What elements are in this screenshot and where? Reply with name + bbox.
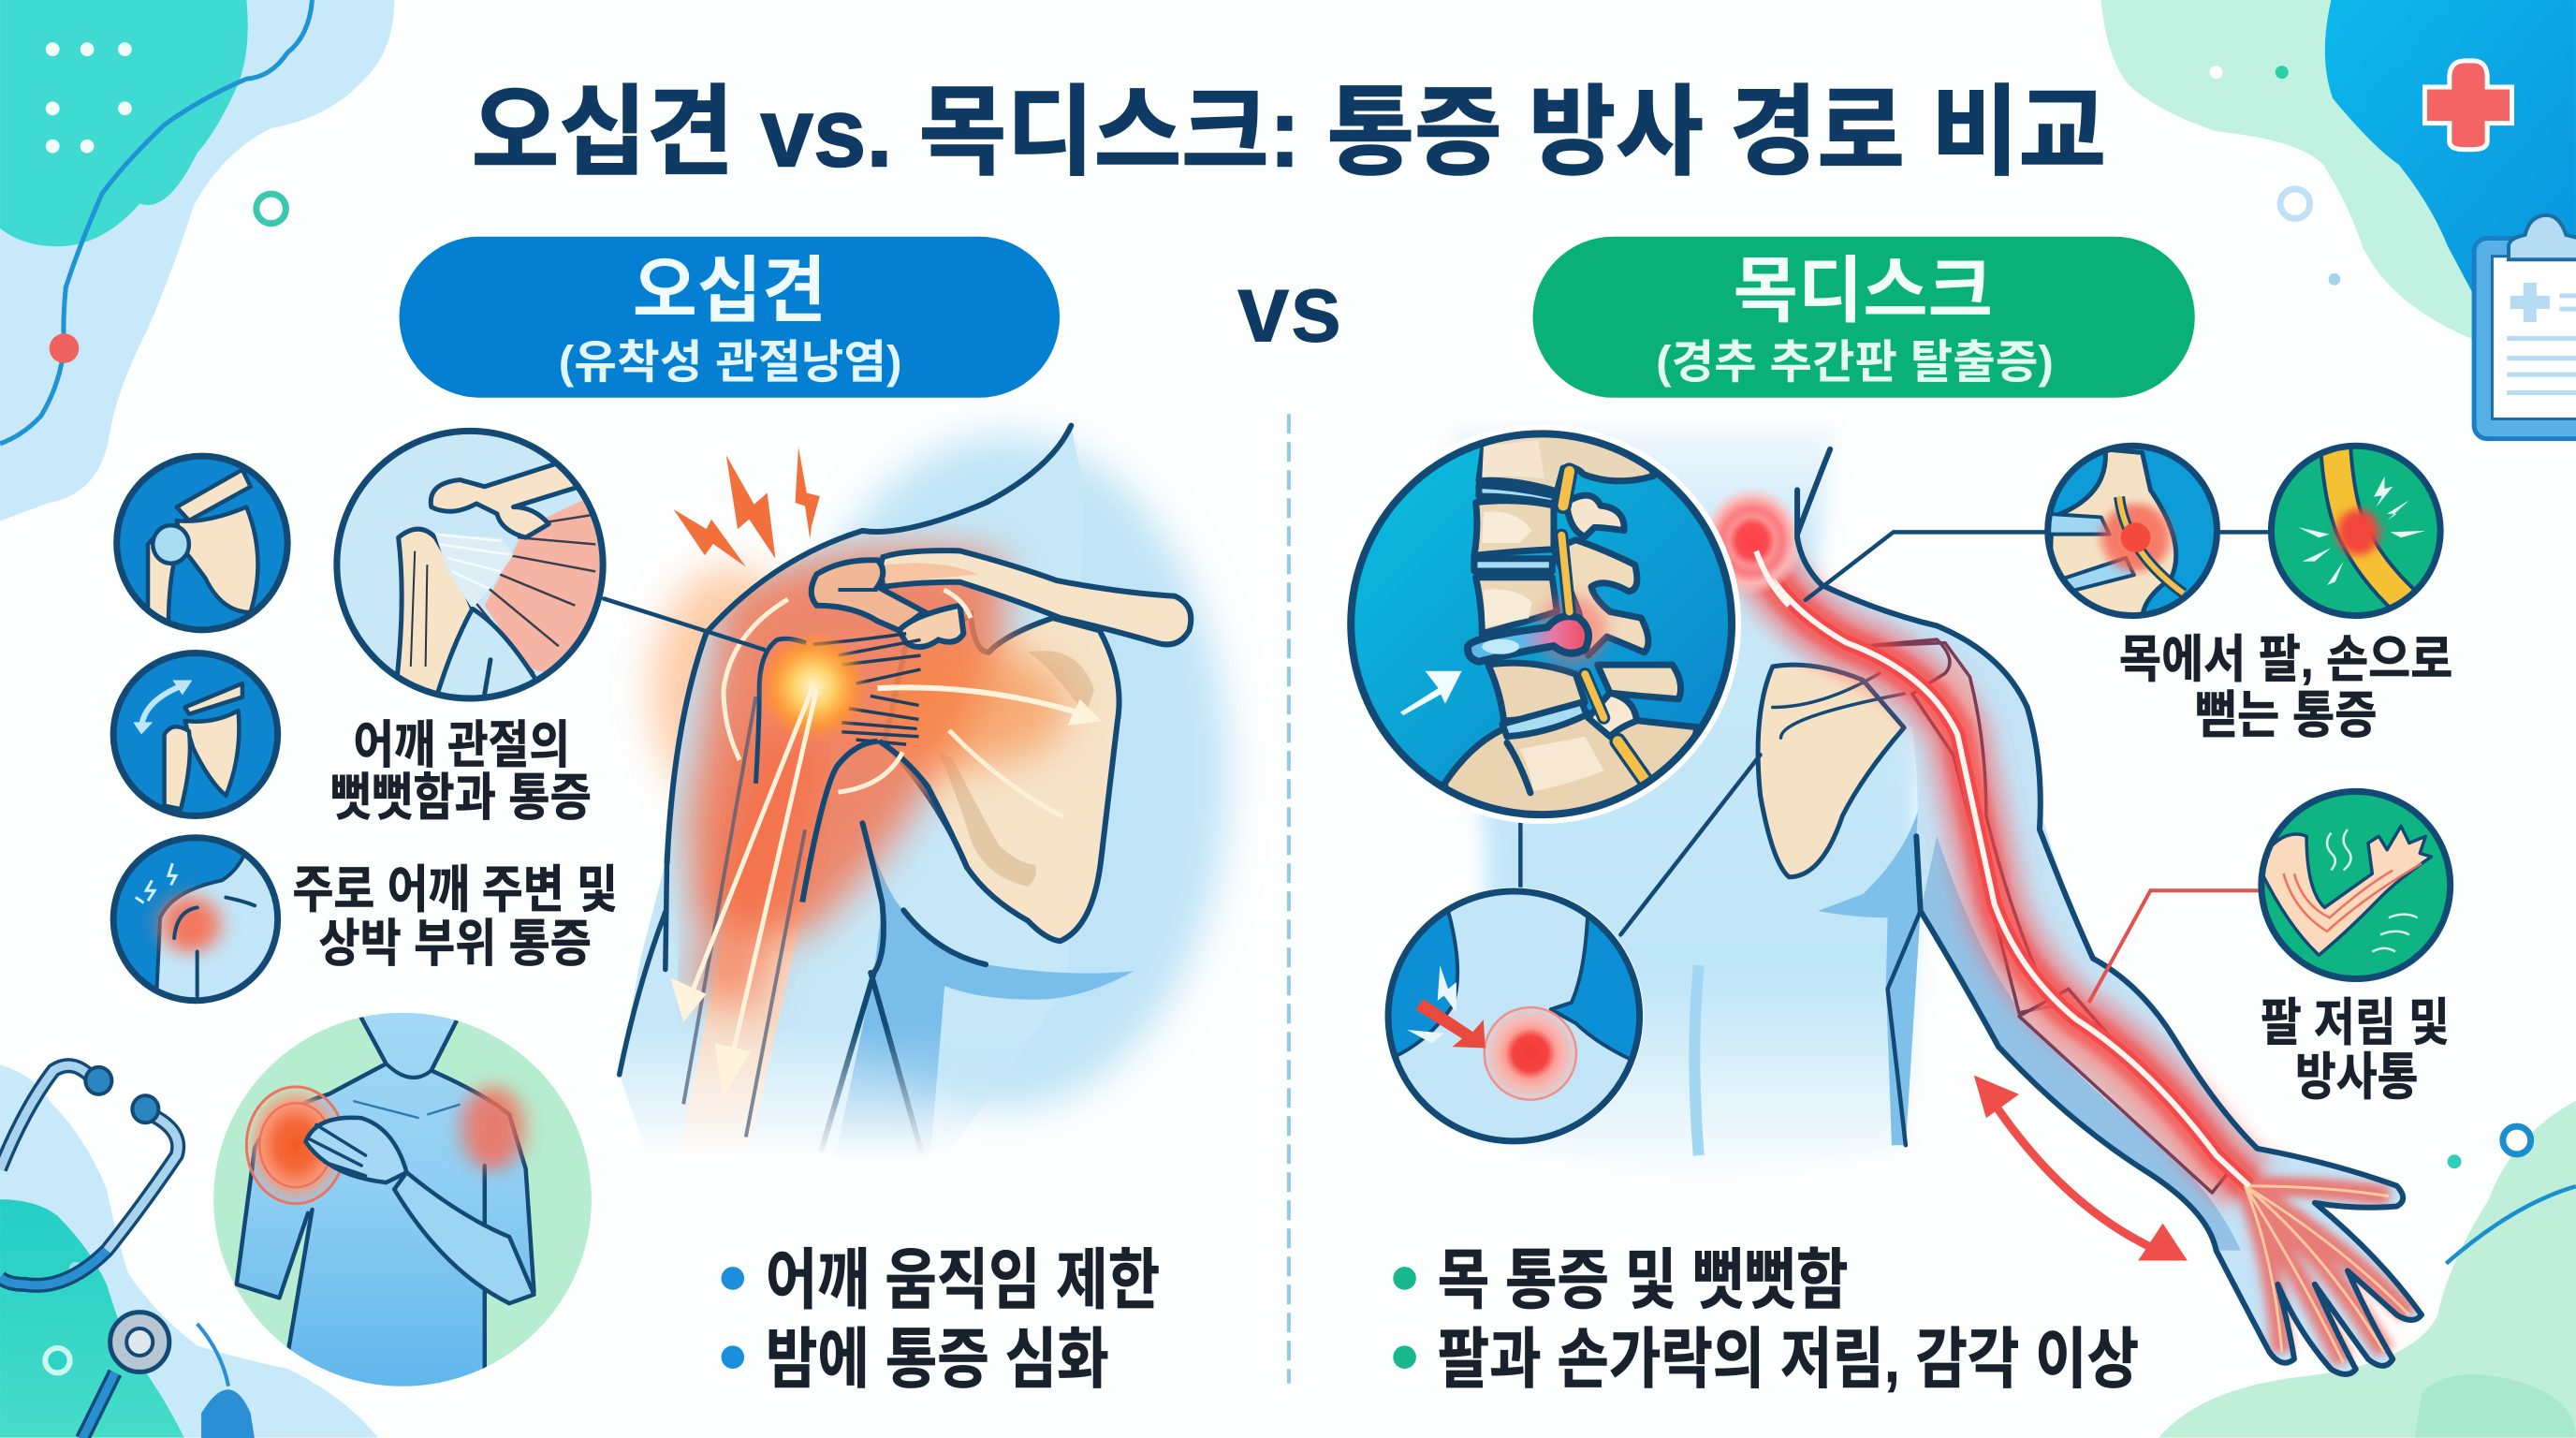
clavicle and acromion — [724, 550, 1191, 902]
inset: upper arm pain — [113, 838, 284, 1003]
inset: patient holding shoulder — [213, 1006, 592, 1393]
peach glow outside shoulder — [652, 566, 810, 814]
nerve white core — [1756, 551, 2249, 1186]
right text labels: 방사통 — [2295, 1049, 2418, 1106]
decor: bottom-right blobs — [2159, 1101, 2576, 1438]
lower arm shading — [1921, 836, 2241, 1251]
panel header: 오십견: (유착성 관절낭염) — [559, 338, 902, 389]
neck nerve start — [1756, 551, 1789, 606]
decor: top-left blobs — [0, 0, 394, 521]
arm bones — [1863, 639, 2229, 1193]
panel header: 목디스크: 목디스크 — [1734, 251, 1993, 331]
left bullet list: 밤에 통증 심화 — [766, 1322, 1109, 1396]
right text labels: 뻗는 통증 — [2195, 687, 2378, 744]
arm outline — [1797, 449, 2422, 1374]
right text labels: 목에서 팔, 손으로 — [2119, 631, 2452, 688]
torso lines — [822, 823, 986, 1158]
left bullet list — [722, 1243, 1160, 1396]
hand glow — [2245, 1186, 2409, 1362]
icon: clipboard — [2474, 215, 2576, 439]
right text labels — [2119, 631, 2452, 1106]
inset: nerve compression — [2048, 446, 2217, 619]
title: 오십견 vs. 목디스크: 통증 방사 경로 비교 — [472, 78, 2106, 187]
panel header: 오십견: 오십견 — [633, 251, 827, 331]
leader line — [604, 598, 764, 650]
inset: cervical spine herniation — [1341, 424, 1741, 824]
decor: bottom-left blobs — [0, 1064, 378, 1438]
wide nerve glow — [1756, 551, 2249, 1186]
icon: pain bolts — [674, 447, 820, 566]
bones under the pain area — [677, 615, 1120, 1158]
red pain field inside shoulder — [687, 548, 1068, 1003]
left bullet list: 어깨 움직임 제한 — [766, 1243, 1160, 1317]
inset: range of motion — [113, 653, 278, 816]
body outline — [667, 426, 1071, 862]
left text labels: 어깨 관절의 — [353, 716, 570, 773]
arm fill — [1781, 537, 2422, 1374]
scapula — [1758, 665, 1904, 877]
left text labels: 뻣뻣함과 통증 — [330, 769, 592, 826]
hand nerves — [2245, 1186, 2409, 1362]
inset: neck pain — [1379, 884, 1649, 1145]
double arrow — [1974, 1076, 2188, 1261]
panel header: 오십견 — [400, 237, 1060, 398]
underarm shading — [1818, 782, 1930, 1145]
flank shade — [1694, 965, 1699, 1155]
lower arm lines and radiating arrows — [620, 631, 869, 1137]
inset: pinched nerve — [2271, 443, 2440, 616]
nerve core red — [1756, 551, 2249, 1186]
right text labels: 팔 저림 및 — [2261, 994, 2450, 1051]
left text labels — [292, 716, 618, 973]
right figure: neck to hand — [1379, 428, 2451, 1374]
left text labels: 주로 어깨 주변 및 — [292, 861, 618, 918]
leaders — [1520, 532, 2311, 934]
arm and torso fill — [620, 426, 1084, 1183]
decor: top-right blobs — [2101, 0, 2576, 427]
zoom insets, left panel — [113, 431, 764, 1393]
neck burst — [1701, 487, 1803, 595]
shoulder illustration — [620, 426, 1191, 1183]
armpit shading — [838, 851, 1134, 1145]
vs label: vs — [1237, 254, 1342, 363]
right bullet list: 목 통증 및 뻣뻣함 — [1438, 1243, 1848, 1317]
red leader — [2089, 890, 2261, 1003]
panel header: 목디스크 — [1532, 237, 2195, 398]
torso background — [1453, 428, 1921, 1186]
nerve glow — [1756, 551, 2249, 1186]
left text labels: 상박 부위 통증 — [319, 916, 592, 973]
inset: rotator cuff magnifier — [337, 431, 604, 700]
right bullet list — [1393, 1243, 2139, 1396]
panel header: 목디스크: (경추 추간판 탈출증) — [1656, 338, 2054, 389]
center dashed divider — [1287, 414, 1291, 1384]
inset: numb arm — [2257, 791, 2451, 979]
inset: shoulder joint — [117, 456, 287, 630]
soft blue backdrop behind shoulder — [783, 435, 1227, 1109]
torso edge — [1888, 911, 1921, 1145]
right bullet list: 팔과 손가락의 저림, 감각 이상 — [1438, 1322, 2139, 1396]
icon: stethoscope — [0, 1065, 255, 1438]
